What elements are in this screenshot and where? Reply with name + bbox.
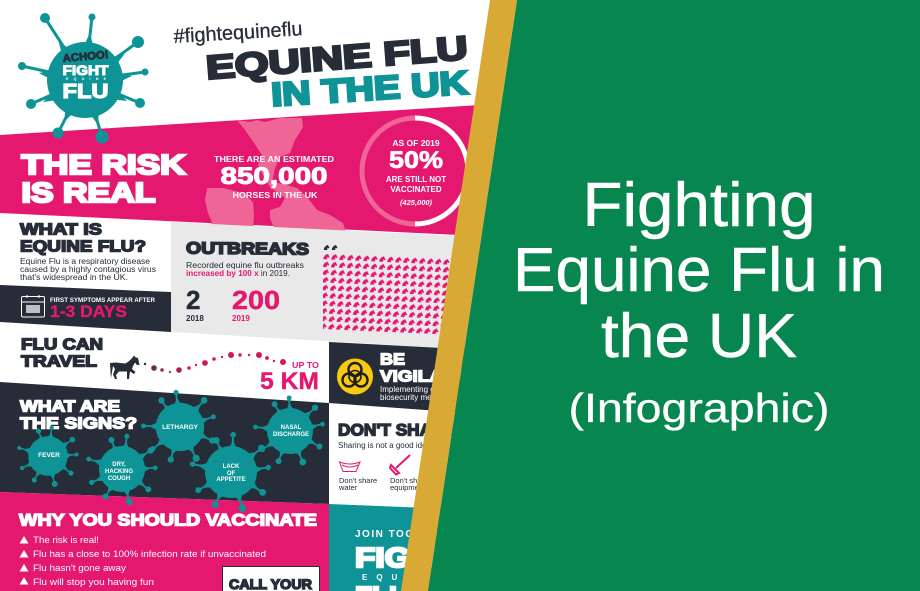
heading: flu can travel: FLU CAN	[21, 336, 103, 354]
chart: virus trail dots	[144, 352, 286, 373]
text: first symptoms: 1-3 DAYS	[50, 302, 127, 321]
list: reasons to vaccinate: The risk is real!	[33, 535, 99, 545]
heading: the risk is real: IS REAL	[22, 177, 156, 208]
text: don't share water	[338, 476, 377, 492]
button: call your vet	[222, 566, 320, 591]
text: outbreaks description: Recorded equine flu outbreaks	[186, 261, 304, 270]
stat: 850,000 horses	[214, 155, 334, 200]
stat: 50 percent not vaccinated: AS OF 2019	[392, 138, 440, 148]
virus: dry hacking cough	[83, 430, 160, 507]
panel: be vigilant background	[329, 342, 480, 414]
text: don't share water: water	[338, 483, 358, 492]
heading: be vigilant: VIGILANT	[380, 368, 468, 386]
heading: be vigilant: BE	[380, 352, 405, 368]
virus: nasal discharge	[251, 393, 328, 469]
text: join together to fight equine flu: JOIN TOGETHER	[355, 529, 456, 540]
list: reasons to vaccinate: Flu has a close to 100% infection rate if unvaccinated	[33, 549, 266, 559]
list: reasons to vaccinate: Flu hasn't gone away	[33, 563, 127, 573]
stat: 850,000 horses: 850,000	[220, 163, 328, 190]
heading: outbreaks: OUTBREAKS	[186, 240, 309, 259]
heading: what is equine flu: WHAT IS	[20, 222, 102, 238]
text: first symptoms: FIRST SYMPTOMS APPEAR AFTER	[50, 297, 155, 304]
heading: what are the signs: WHAT ARE	[20, 398, 120, 416]
virus: fever	[15, 423, 80, 488]
panel: first symptoms background	[0, 285, 171, 332]
text: what is equine flu description: caused by a highly contagious virus	[20, 265, 156, 274]
icon: biohazard	[337, 358, 373, 394]
stat: 850,000 horses: HORSES IN THE UK	[232, 191, 318, 200]
stat: up to 5 km: 5 KM	[260, 368, 319, 395]
text: don't share equipment	[390, 476, 428, 492]
hashtag: #fightequineflu	[173, 18, 303, 48]
text: biosecurity: biosecurity measures	[380, 393, 456, 402]
text: join together to fight equine flu: FIGHT	[355, 542, 455, 573]
virus: lethargy: LETHARGY	[162, 424, 199, 431]
panel: what are the signs background	[0, 382, 329, 504]
virus: lethargy	[136, 384, 223, 470]
map of the UK	[205, 118, 346, 240]
heading: flu can travel: TRAVEL	[21, 354, 97, 370]
logo text: fight: FIGHT	[62, 62, 109, 78]
stat: 50 percent not vaccinated: VACCINATED	[390, 185, 442, 194]
icon: horse	[110, 356, 140, 379]
stat: up to 5 km: UP TO	[292, 361, 319, 370]
text: what is equine flu description: that's widespread in the UK.	[20, 273, 128, 282]
text: don't share water: Don't share	[339, 476, 377, 485]
title: in the uk: IN THE UK	[270, 64, 469, 113]
stat: 50 percent not vaccinated: (425,000)	[400, 198, 433, 207]
stat: 200 in 2019: 200	[232, 285, 280, 315]
heading: be vigilant	[380, 352, 468, 386]
stat: 200 in 2019: 2019	[232, 314, 250, 323]
title: fighting equine flu in the uk: Fighting	[582, 171, 816, 240]
stat: 850,000 horses: THERE ARE AN ESTIMATED	[214, 155, 334, 164]
text: what is equine flu description	[20, 257, 156, 282]
panel: green title panel	[428, 0, 920, 591]
text: outbreaks description: increased by 100 x in 2019.	[186, 269, 290, 278]
text: join together to fight equine flu: EQUINE	[362, 573, 447, 582]
text: biosecurity	[380, 385, 456, 402]
text: don't share equipment: equipment	[390, 483, 426, 492]
title: fighting equine flu in the uk	[513, 171, 885, 371]
list: reasons to vaccinate	[20, 535, 266, 587]
icon: calendar	[22, 295, 44, 317]
heading: don't share: DON'T SHARE	[338, 422, 456, 440]
text: first symptoms	[50, 297, 155, 321]
virus: dry hacking cough: COUGH	[108, 476, 130, 482]
heading: what are the signs	[20, 398, 137, 432]
text: outbreaks description	[186, 261, 304, 278]
virus: lack of appetite: APPETITE	[216, 477, 246, 483]
text: sharing is not a good idea: Sharing is not a good idea	[338, 441, 432, 450]
logo text: flu: FLU	[62, 81, 108, 103]
virus: dry hacking cough: HACKING	[105, 469, 133, 475]
virus: nasal discharge: NASAL	[281, 425, 302, 431]
list: reasons to vaccinate: Flu will stop you having fun	[33, 577, 154, 587]
chart: 50 percent ring	[362, 118, 468, 224]
stat: 50 percent not vaccinated	[386, 138, 446, 207]
virus: lack of appetite: LACK	[223, 464, 240, 470]
heading: the risk is real: THE RISK	[22, 149, 186, 180]
text: what is equine flu description: Equine Flu is a respiratory disease	[20, 257, 151, 266]
stat: 2 in 2018	[186, 285, 204, 323]
stat: 50 percent not vaccinated: 50%	[389, 147, 443, 174]
panel: the risk is real	[0, 105, 480, 240]
heading: flu can travel	[21, 336, 103, 370]
text: don't share equipment: Don't share	[390, 476, 428, 485]
text: biosecurity: Implementing good	[380, 385, 448, 394]
title: equine flu: EQUINE FLU	[205, 29, 469, 86]
stat: 2 in 2018: 2	[186, 285, 200, 315]
panel: join together background	[329, 504, 480, 591]
heading: what are the signs: THE SIGNS?	[20, 416, 137, 432]
logo: fight equine flu virus	[18, 13, 148, 144]
heading: what is equine flu: EQUINE FLU?	[20, 238, 146, 256]
panel: outbreaks background	[171, 222, 480, 350]
heading: why you should vaccinate: WHY YOU SHOULD VACCINATE	[19, 512, 317, 530]
subtitle: infographic: (Infographic)	[568, 385, 830, 431]
stat: 2 in 2018: 2018	[186, 314, 204, 323]
virus: lack of appetite	[190, 432, 271, 512]
chart: horse head pictogram	[323, 245, 460, 336]
heading: what is equine flu	[20, 222, 146, 256]
virus: fever: FEVER	[38, 452, 60, 459]
virus: dry hacking cough: DRY,	[112, 462, 126, 468]
title: fighting equine flu in the uk: Equine Flu in	[513, 236, 885, 305]
stat: 50 percent not vaccinated: ARE STILL NOT	[386, 175, 446, 184]
logo text: achoo: ACHOO!	[62, 49, 109, 65]
text: join together to fight equine flu	[355, 529, 456, 591]
virus: lack of appetite: OF	[227, 471, 235, 477]
gold diagonal stripe	[401, 0, 517, 591]
icon: brush	[390, 455, 410, 474]
heading: the risk is real	[22, 149, 186, 208]
panel: why you should vaccinate background	[0, 492, 329, 591]
virus: nasal discharge: DISCHARGE	[273, 432, 309, 438]
title: fighting equine flu in the uk: the UK	[601, 302, 797, 371]
logo text: equine: EQUINE	[66, 77, 107, 81]
icon: basin	[340, 462, 360, 472]
